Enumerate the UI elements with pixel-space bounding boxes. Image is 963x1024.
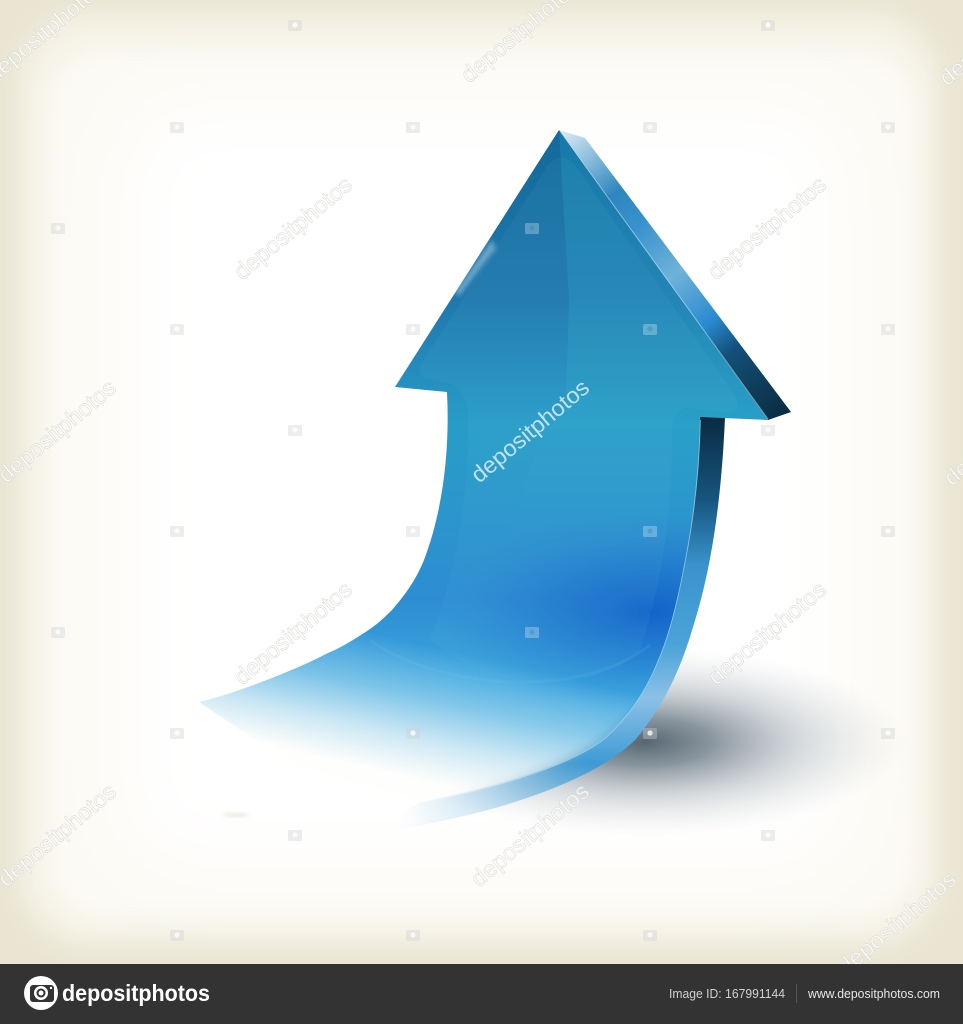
watermark wordmarks: depositphotos [703,171,831,285]
edge highlight line [419,420,700,803]
arrow soft underlay [199,417,700,803]
small smudge [222,813,250,817]
inner glass highlight [420,158,738,682]
image id: Image ID: 167991144 [669,986,785,1001]
arrow side face [414,417,725,826]
website url: www.depositphotos.com [807,986,940,1001]
watermark wordmarks: depositphotos [466,778,594,892]
watermark wordmarks: depositphotos [229,171,357,285]
icon: camera logo [24,976,58,1010]
head edge highlight [560,131,768,419]
watermark wordmarks: depositphotos [229,576,357,690]
watermark on arrow: depositphotos [466,374,594,488]
blue rising arrow [180,120,791,837]
logo wordmark: depositphotos [62,980,210,1006]
watermark wordmarks: depositphotos [833,866,961,980]
deep blue tint at lower right [495,538,689,694]
arrow front face [199,130,768,787]
lens arc [626,644,650,662]
watermark camera icons [51,20,895,941]
arrow head bevel [559,130,791,420]
darker left half of the head [396,130,569,402]
ground shadow [383,648,907,836]
watermark wordmarks: depositphotos [703,576,831,690]
head left glint [455,240,496,296]
footer bar [0,964,963,1024]
footer logo [24,976,210,1010]
